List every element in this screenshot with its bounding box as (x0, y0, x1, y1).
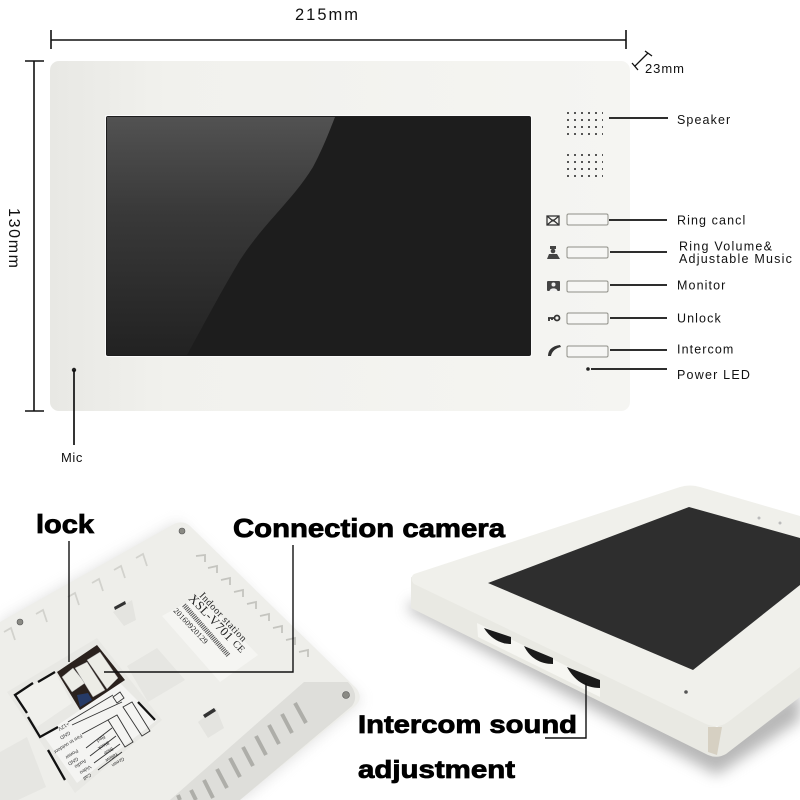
icon: handset (548, 345, 561, 356)
rear body (0, 522, 360, 800)
callout: ring volume and music (610, 240, 793, 266)
callouts: function labels (61, 113, 793, 465)
terminal wiring panel (7, 638, 162, 793)
LED hole (684, 690, 688, 694)
sticker: CE (230, 639, 247, 655)
callout: mic (61, 370, 83, 465)
sticker: XSL-V701 (186, 591, 236, 644)
speaker grille top (565, 112, 603, 140)
mic hole (72, 368, 76, 372)
speaker grille bottom (565, 153, 603, 181)
leader: lock (68, 541, 70, 662)
callout: monitor: Monitor (677, 278, 726, 292)
terminal wiring panel: Yellow (104, 750, 119, 763)
heading: lock: lock (36, 509, 95, 539)
angled screen (488, 507, 800, 670)
callout: ring cancel (609, 214, 746, 228)
callout: unlock (610, 312, 722, 326)
callout: monitor (610, 278, 726, 292)
button: unlock (567, 313, 608, 324)
dimension: height 130mm: 130mm (5, 208, 22, 268)
callout: ring cancel: Ring cancl (677, 214, 746, 228)
heading: intercom sound adjustment (358, 711, 577, 784)
button: intercom (567, 346, 608, 357)
terminal wiring panel: Black (96, 739, 110, 751)
dimension: depth 23mm (632, 51, 684, 76)
dimension: width 215mm: 215mm (295, 6, 358, 24)
side wheel recess (477, 623, 600, 697)
callout: mic: Mic (61, 450, 83, 465)
dimension: depth 23mm: 23mm (645, 61, 684, 76)
mounting slots (113, 600, 224, 738)
device side edge (411, 577, 800, 757)
terminal wiring panel: GND (58, 729, 71, 740)
sticker: Indoor station (197, 591, 249, 645)
connectors (62, 652, 118, 697)
terminal wiring panel: Power (64, 747, 79, 760)
icon: monitor portrait (547, 281, 560, 291)
recess panels (127, 648, 185, 702)
screws (17, 528, 350, 698)
leader: intercom sound (545, 683, 586, 738)
heading: intercom sound adjustment: adjustment (358, 756, 516, 784)
vents: upper left row (4, 554, 147, 640)
terminal wiring panel: +12V (56, 720, 70, 732)
terminal wiring panel: GND (66, 755, 79, 766)
adjustment wheels (484, 628, 600, 688)
heading: connection camera: Connection camera (233, 513, 506, 543)
button: monitor (567, 281, 608, 292)
terminal wiring panel: Fire to outdoor (52, 732, 83, 755)
terminal wiring panel: Audio (73, 757, 87, 769)
rear lower bevel (170, 682, 355, 800)
sticker (162, 591, 258, 682)
icon: envelope (547, 216, 559, 225)
callout: power LED: Power LED (677, 368, 751, 382)
front button dots (758, 516, 782, 524)
heading: intercom sound adjustment: Intercom sound (358, 711, 577, 739)
power LED (586, 367, 590, 371)
button: ring volume (567, 247, 608, 258)
sticker: 20160920129 (172, 606, 210, 646)
dimension: height 130mm (5, 61, 44, 411)
callout: ring volume and music: Ring Volume& (679, 240, 773, 254)
callout: intercom (610, 342, 734, 356)
corner highlight (708, 727, 722, 755)
callout: speaker (609, 113, 731, 127)
vents: lower row (178, 703, 306, 800)
icon: key (548, 316, 560, 321)
black marks (15, 672, 155, 780)
wiring diagram (68, 692, 150, 770)
leader: connection camera (104, 545, 293, 672)
callout: intercom: Intercom (677, 342, 734, 356)
panel: rear view of monitor (0, 522, 362, 800)
dimension: width 215mm (51, 6, 626, 49)
connector cavity (57, 645, 125, 710)
rear shadow (0, 522, 362, 800)
icon: person with hat (547, 246, 560, 259)
screen (105, 115, 532, 357)
terminal wiring panel: Red (95, 733, 106, 743)
device shadow (408, 600, 800, 775)
vents: upper right row (196, 555, 308, 657)
device top surface (412, 486, 800, 726)
terminal wiring panel: Green (110, 755, 125, 768)
callout: unlock: Unlock (677, 312, 722, 326)
panel: front view of indoor monitor (50, 61, 630, 411)
panel: angled view of monitor (408, 486, 800, 775)
monitor body (50, 61, 630, 411)
terminal wiring panel: Video (78, 763, 92, 775)
callout: speaker: Speaker (677, 113, 731, 127)
terminal wiring panel: Blue (102, 745, 114, 756)
terminal wiring panel: Call (82, 771, 92, 781)
button: ring cancel (567, 214, 608, 225)
blue terminal (77, 693, 92, 707)
callout: ring volume and music: Adjustable Music (679, 252, 793, 266)
